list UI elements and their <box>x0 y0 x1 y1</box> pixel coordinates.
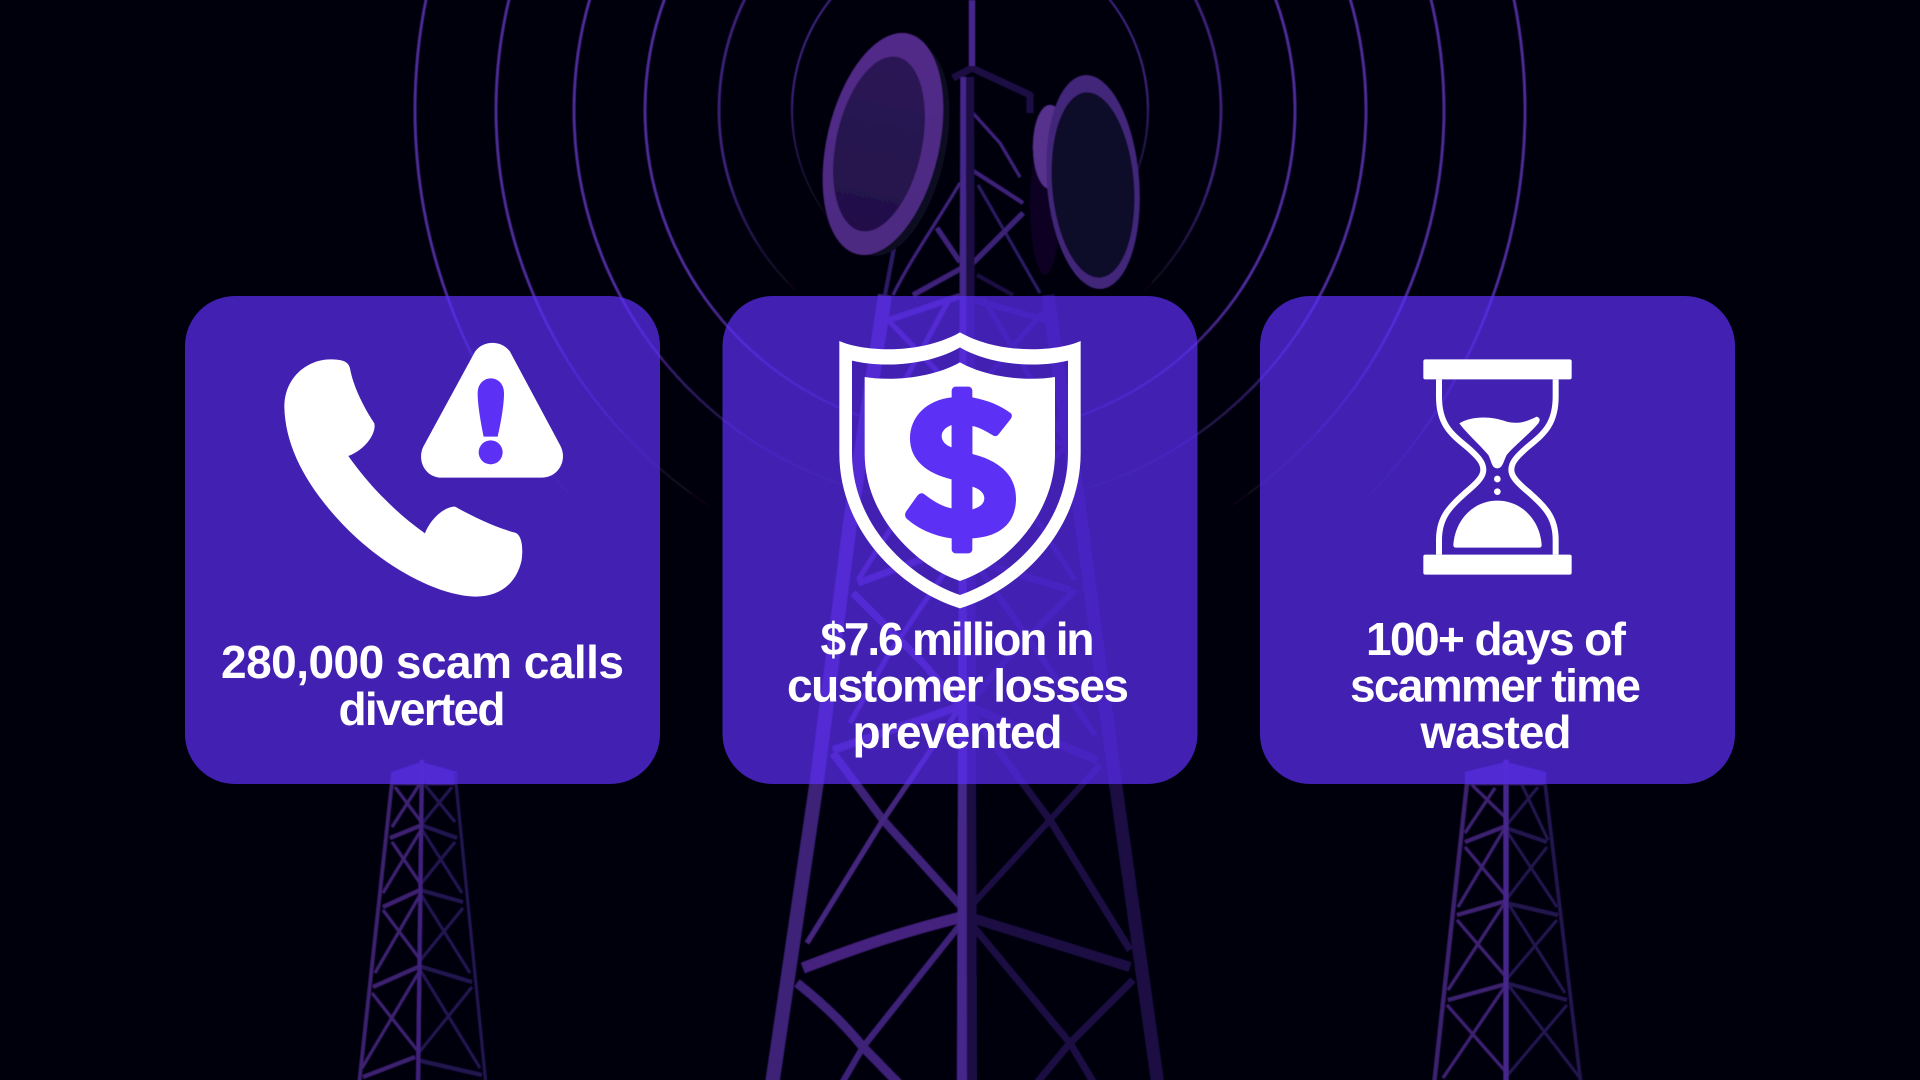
panel: scam calls diverted <box>185 296 660 784</box>
satellite dish left <box>803 21 968 267</box>
panel: scammer time wasted <box>1260 296 1735 784</box>
icon: phone with warning triangle <box>284 343 563 597</box>
satellite dish right <box>1030 72 1147 292</box>
signal wave arcs <box>415 0 1525 665</box>
card background right <box>1260 296 1735 784</box>
icon: shield with dollar sign <box>839 332 1081 608</box>
stat text: $7.6 million in customer losses prevented: customer losses <box>787 660 1129 712</box>
card background left <box>185 296 660 784</box>
icon: hourglass <box>1423 359 1572 575</box>
small tower left <box>359 760 486 1080</box>
stat text: $7.6 million in customer losses prevented: prevented <box>852 706 1062 758</box>
stat text: $7.6 million in customer losses prevented: $7.6 million in <box>820 613 1094 665</box>
card background centre <box>722 296 1198 784</box>
panel: customer losses prevented <box>722 296 1198 784</box>
small tower right <box>1434 760 1581 1080</box>
stat text: 280,000 scam calls diverted: diverted <box>338 683 506 735</box>
stat text: 100+ days of scammer time wasted: scammer time <box>1350 660 1641 712</box>
stat text: 100+ days of scammer time wasted: wasted <box>1420 706 1572 758</box>
central tower <box>772 0 1158 1080</box>
stat text: 100+ days of scammer time wasted: 100+ days of <box>1366 613 1627 665</box>
stat text: 280,000 scam calls diverted: 280,000 scam calls <box>221 636 624 688</box>
